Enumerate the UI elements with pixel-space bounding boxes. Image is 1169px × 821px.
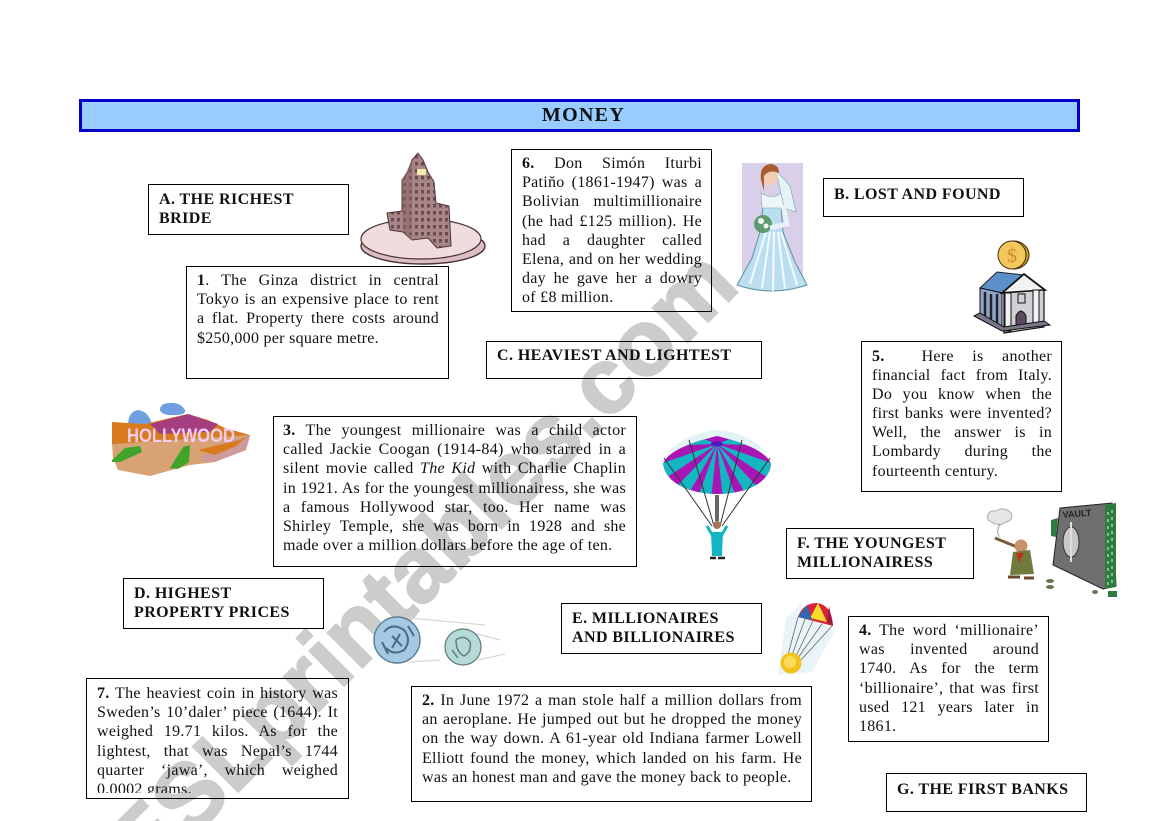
text box 3: silent movie called The Kid with Charlie Chaplin (283, 460, 626, 477)
text box 6: Bolivian multimillionaire (522, 193, 702, 210)
text box 1: a flat. Property there costs around (197, 310, 439, 327)
heading box G: G. THE FIRST BANKS (897, 781, 1068, 798)
heading box E (561, 603, 762, 654)
text box 5: Well, the answer is in (872, 424, 1052, 441)
text box 6: had a daughter called (522, 232, 702, 249)
text box 6: Elena, and on her wedding (522, 251, 702, 268)
text box 7: weighed 19.71 kilos. As for the (97, 723, 338, 740)
text box 1: 1. The Ginza district in central (197, 272, 439, 289)
text box 3: made over a million dollars before the age of ten. (283, 537, 612, 554)
icon: coin dropping into a bank (973, 240, 1052, 334)
heading box C: C. HEAVIEST AND LIGHTEST (497, 347, 731, 364)
text box 2 (411, 686, 812, 802)
text box 5: fourteenth century. (872, 463, 998, 480)
text box 5 (861, 341, 1062, 492)
text box 5: first banks were invented? (872, 405, 1052, 422)
text box 4: 1740. As for the term (859, 660, 1039, 677)
text box 2: an aeroplane. He jumped out but he dropped the money (422, 711, 802, 728)
text box 5: Do you know when the (872, 386, 1052, 403)
text box 4: was invented around (859, 641, 1039, 658)
heading box A: A. THE RICHEST (159, 191, 294, 208)
text box 5: 5. Here is another (872, 348, 1052, 364)
title banner: MONEY (542, 104, 625, 126)
heading box B (823, 178, 1024, 217)
heading box D (123, 578, 324, 629)
text box 2: Elliott found the money, which landed on his farm. He (422, 750, 802, 767)
icon: coin on a small parachute (778, 603, 834, 675)
heading box E: E. MILLIONAIRES (572, 610, 719, 627)
text box 3 (273, 416, 637, 567)
heading box A: BRIDE (159, 210, 212, 227)
text box 5: financial fact from Italy. (872, 367, 1052, 384)
heading box E: AND BILLIONAIRES (572, 629, 735, 646)
text box 4 (848, 616, 1049, 742)
text box 6: of £8 million. (522, 289, 613, 306)
text box 6: 6. Don Simón Iturbi (522, 155, 702, 172)
text box 4: used 121 years later in (859, 699, 1039, 716)
heading box C (486, 341, 762, 379)
text box 5: Lombardy during the (872, 443, 1052, 460)
heading box A (148, 184, 349, 235)
heading box B: B. LOST AND FOUND (834, 186, 1001, 203)
icon: Hollywood sign: HOLLYWOOD (127, 426, 235, 447)
icon: man with cigar and money vault: VAULT (1062, 507, 1092, 520)
icon: parachutist (663, 430, 771, 560)
text box 3: 3. The youngest millionaire was a child actor (283, 422, 626, 439)
text box 1 (186, 266, 449, 379)
heading box G (886, 773, 1087, 812)
text box 6: Patiňo (1861-1947) was a (522, 174, 702, 191)
text box 3: a famous Hollywood star, too. Her name was (283, 499, 626, 516)
text box 2: 2. In June 1972 a man stole half a million dollars from (422, 692, 802, 709)
icon: Hollywood sign (112, 402, 250, 476)
text box 7 (86, 678, 349, 799)
text box 7: 7. The heaviest coin in history was (97, 685, 338, 702)
text box 2: was an honest man and gave the money back to people. (422, 769, 792, 786)
text box 7: lightest, that was Nepal’s 1744 (97, 743, 338, 760)
text box 7: Sweden’s 10’daler’ piece (1644). It (97, 704, 338, 721)
icon: coin dropping into a bank: $ (1007, 245, 1017, 267)
heading box F: F. THE YOUNGEST (797, 535, 946, 552)
icon: man with cigar and money vault (987, 502, 1117, 597)
text box 3: in 1921. As for the youngest millionairess, she was (283, 480, 626, 497)
title banner (79, 99, 1080, 132)
text box 3: Shirley Temple, she was born in 1928 and she (283, 518, 626, 535)
text box 1: $250,000 per square metre. (197, 330, 379, 347)
text box 3: called Jackie Coogan (1914-84) who starred in a (283, 441, 626, 458)
text box 6: (he had £125 million). He (522, 213, 702, 230)
heading box D: PROPERTY PRICES (134, 604, 290, 621)
text box 6 (511, 149, 712, 312)
heading box F (786, 528, 974, 579)
icon: two flying coins (373, 616, 505, 666)
text box 4: 1861. (859, 718, 896, 735)
text box 4: 4. The word ‘millionaire’ (859, 622, 1039, 639)
text box 2: on the way down. A 61-year old Indiana farmer Lowell (422, 730, 802, 747)
icon: skyscrapers on a plinth (360, 152, 486, 265)
text box 4: ‘billionaire’, that was first (859, 680, 1039, 697)
heading box D: D. HIGHEST (134, 585, 232, 602)
text box 7: quarter ‘jawa’, which weighed (97, 762, 338, 779)
heading box F: MILLIONAIRESS (797, 554, 933, 571)
icon: bride in a wedding dress (736, 163, 808, 292)
text box 6: day he gave her a dowry (522, 270, 702, 287)
text box 1: Tokyo is an expensive place to rent (197, 291, 439, 308)
